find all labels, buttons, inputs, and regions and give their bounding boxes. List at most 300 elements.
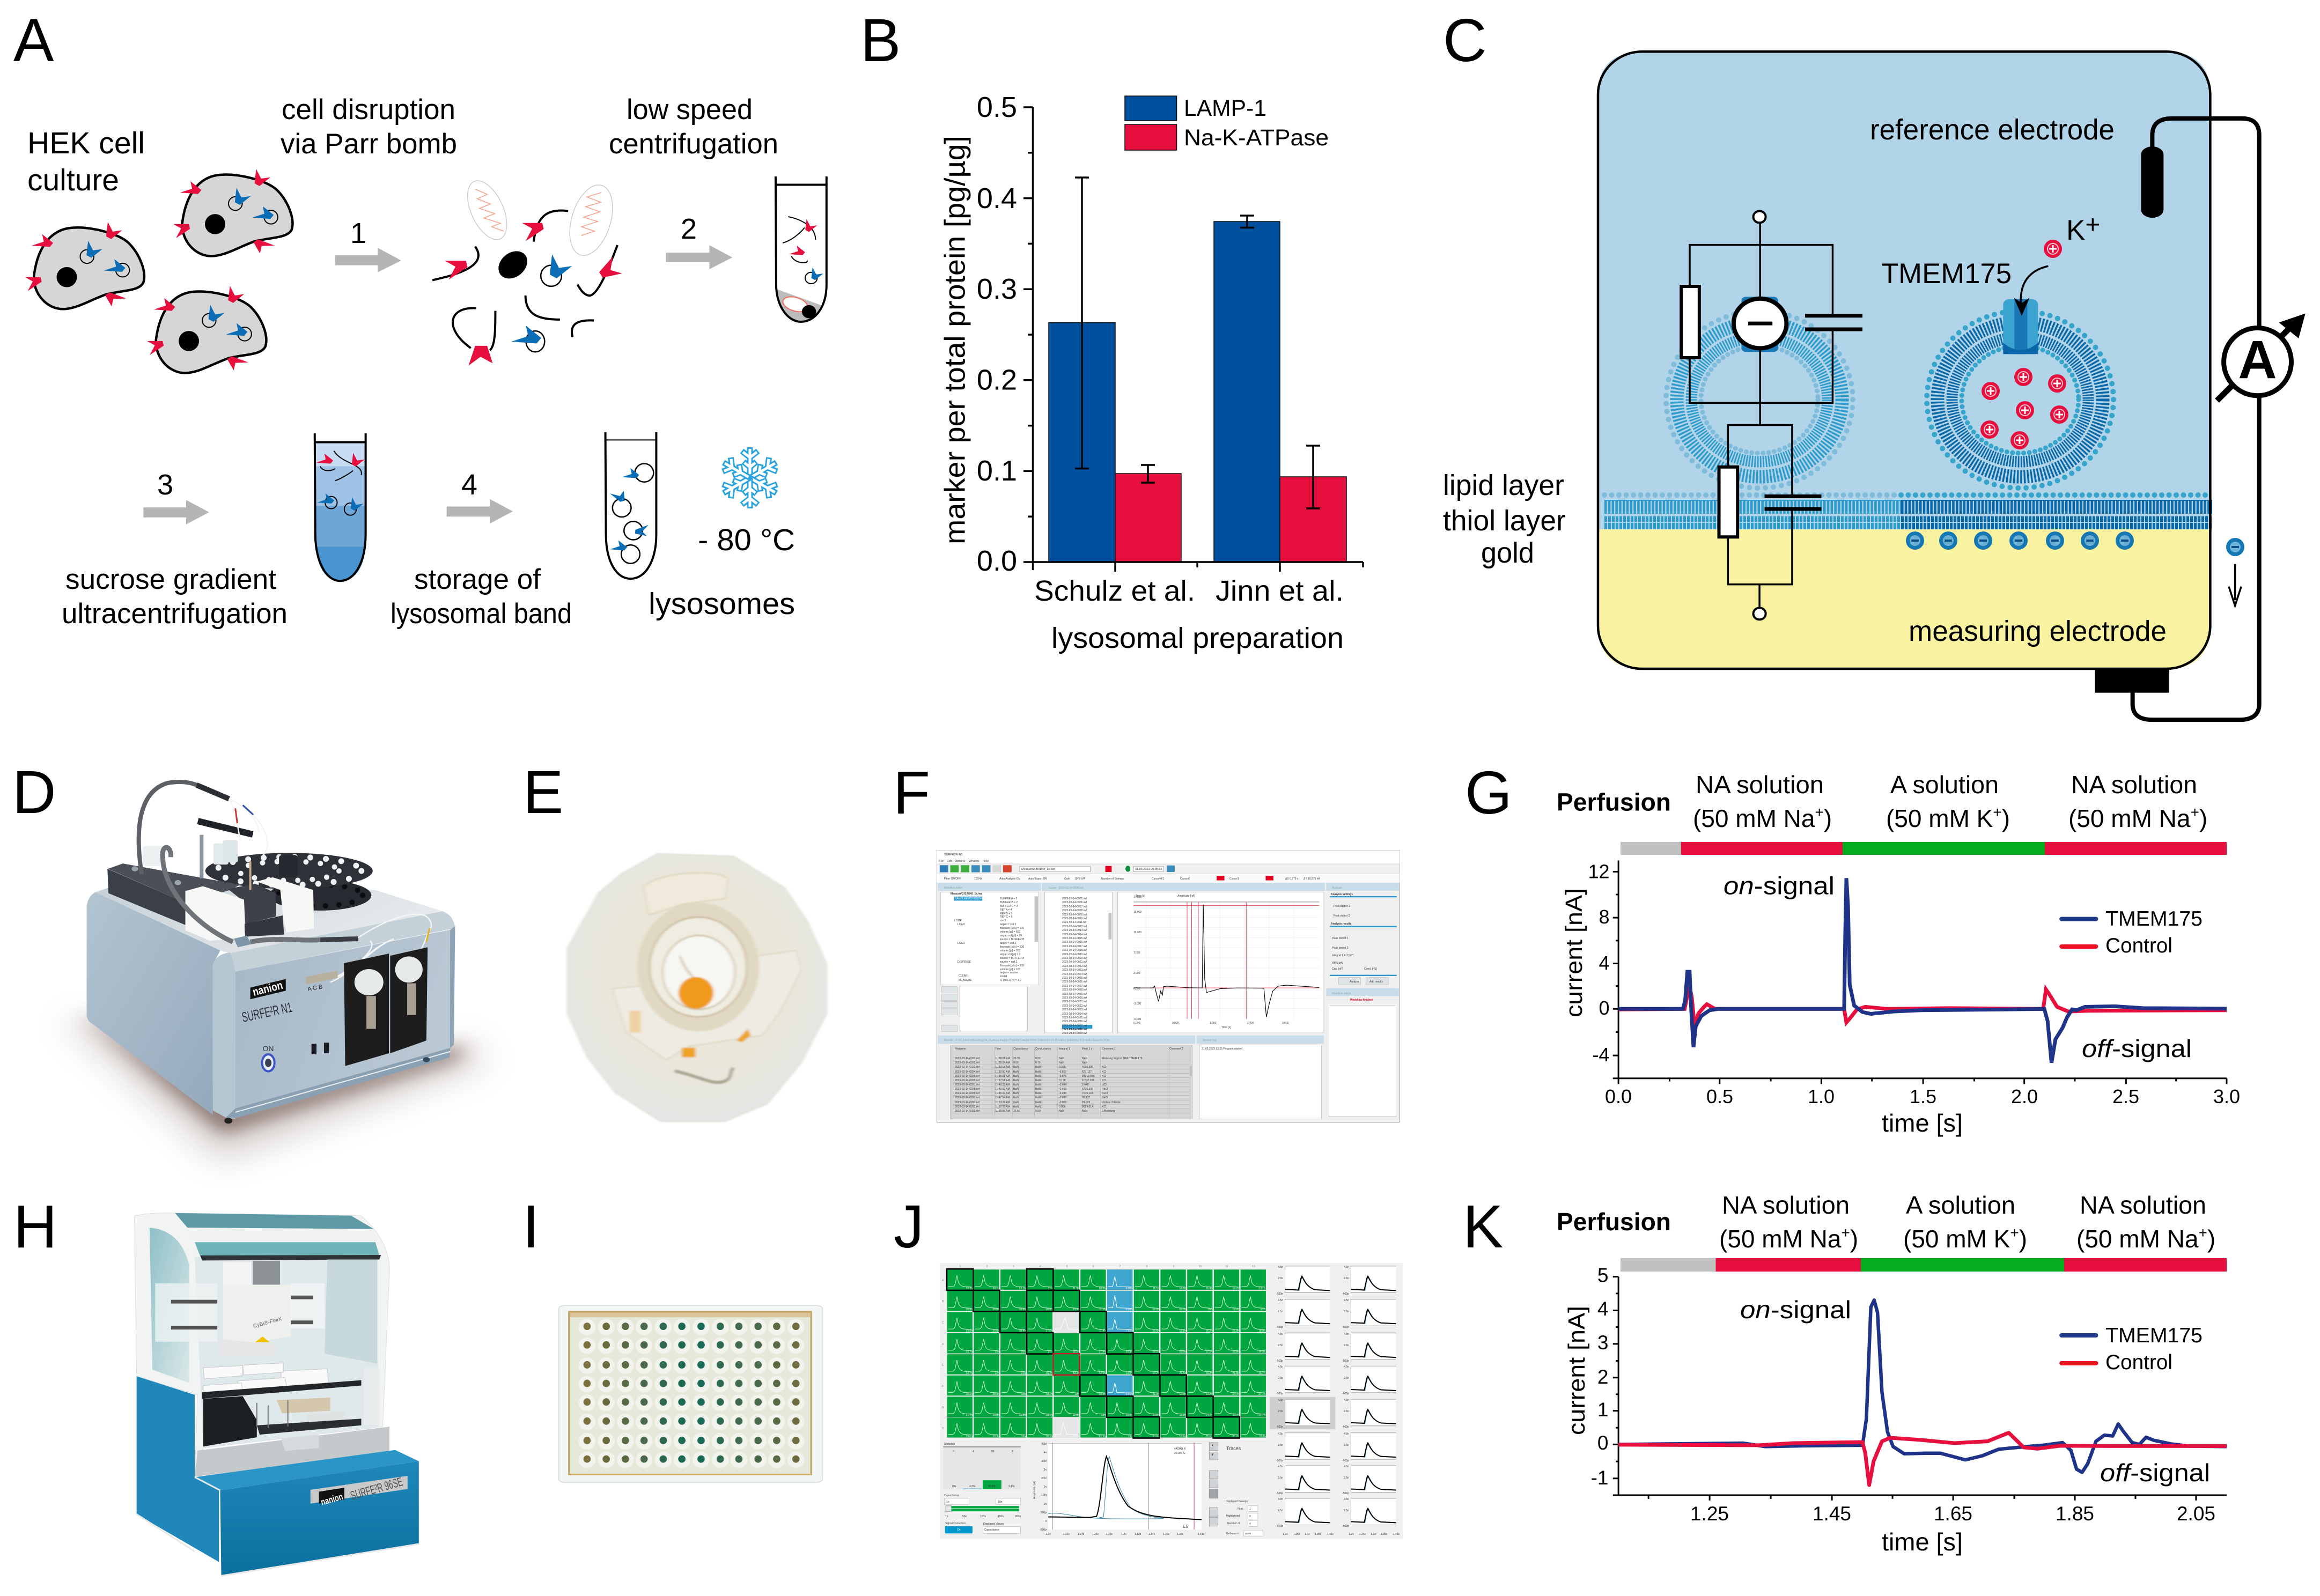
instrument labels: nanion [320, 1491, 344, 1508]
solution labels: + [1815, 804, 1824, 821]
title and menu bars [937, 850, 1400, 864]
screenshot text: 11:28:34 AM [995, 1061, 1010, 1065]
screenshot text: 2.5n [1344, 1509, 1349, 1512]
screenshot text: BUFFER C = 3 [1000, 905, 1018, 908]
screenshot text: 1.36s [1163, 1533, 1170, 1536]
screenshot text: 4 [973, 1450, 974, 1453]
screenshot text: Analysis settings [1331, 893, 1353, 896]
screenshot text: NaN [1035, 1101, 1041, 1104]
screenshot text: 3 [1013, 1265, 1014, 1268]
screenshot text: NaN [1035, 1105, 1041, 1109]
label G: G [1465, 759, 1512, 826]
screenshot text: 1.2s [1045, 1533, 1051, 1536]
screenshot text: 20n [1021, 1350, 1026, 1354]
logo plate [311, 1476, 408, 1504]
screenshot text: 16.1n [1258, 1372, 1265, 1375]
small trace charts [1285, 1266, 1396, 1525]
screenshot text: KCl [1102, 1079, 1106, 1082]
screenshot text: 22.1n [1179, 1372, 1186, 1375]
panel: G TMEM175 N1 recording [1465, 759, 2240, 1137]
panel: H SURFE2R 96SE instrument [13, 1193, 419, 1576]
x tick labels: 1.5 [1910, 1085, 1936, 1107]
instrument labels: ON [263, 1044, 274, 1053]
screenshot text: Measure\3 BA8+8_1s.iwe [951, 892, 983, 896]
solution labels: (50 mM Na [2076, 1225, 2198, 1253]
screenshot text: -500p [1342, 1425, 1349, 1429]
y tick labels: 1 [1597, 1399, 1608, 1421]
arrow 1 [335, 248, 401, 272]
arrow 3 [143, 500, 209, 524]
screenshot text: NaN [1035, 1083, 1041, 1087]
text: cell disruption via Parr bomb: via Parr bomb [281, 128, 457, 160]
screenshot text: 16.6n [1179, 1287, 1186, 1290]
screenshot text: Session log [1203, 1039, 1217, 1042]
panel: I 96-well sensor plate [522, 1193, 822, 1482]
screenshot text: Displayed Values [983, 1523, 1004, 1526]
screenshot text: NaN [1013, 1079, 1019, 1082]
solution labels: ) [2002, 804, 2010, 832]
screenshot text: 11:40:22 AM [995, 1083, 1010, 1087]
legend [1125, 95, 1329, 151]
screenshot text: 2023-03-14-0032.iwf [1062, 1004, 1087, 1008]
screenshot text: 4.5n [1344, 1432, 1349, 1436]
screenshot text [939, 853, 1383, 1113]
screenshot text: 16.8n [1232, 1350, 1239, 1354]
screenshot text: source = BUFFER A [1000, 957, 1025, 960]
screenshot text: 15.8n [992, 1414, 999, 1417]
ammeter letter: A [2238, 330, 2277, 390]
y tick labels [977, 91, 1017, 577]
screenshot text: 1.25s [1293, 1533, 1300, 1536]
blue and grey wells [1054, 1269, 1132, 1438]
screenshot text: A [942, 1279, 944, 1282]
screenshot text: 0.138 [1059, 1079, 1066, 1082]
screenshot text: 31.05.2023 13:25 Program started [1202, 1047, 1242, 1051]
screenshot text: 17.2n [1205, 1350, 1212, 1354]
screenshot text [942, 1265, 1400, 1536]
screenshot text: 50n [962, 1515, 967, 1518]
screenshot text: Cap. [nF] [1332, 967, 1343, 971]
screenshot text: Auto Analysis ON [999, 877, 1020, 881]
solution labels: + [2198, 1224, 2207, 1241]
screenshot text: 3n [1043, 1468, 1047, 1472]
annotation: on-signal: on-signal [1724, 872, 1835, 900]
axes [1023, 107, 1363, 572]
solution labels: (50 mM Na [1719, 1225, 1841, 1253]
screenshot text: 15.6n [1152, 1329, 1159, 1333]
screenshot text: LiCl [1102, 1083, 1107, 1087]
screenshot text: 150n [998, 1515, 1004, 1518]
sensor plate [559, 1305, 822, 1482]
step numbers: 3 [157, 469, 173, 501]
top glass [175, 1213, 374, 1229]
screenshot text: 1.2s [1283, 1533, 1288, 1536]
vesicle: left (control, equivalent circuit) [1666, 311, 1853, 488]
screenshot text: 2.5n [1278, 1444, 1283, 1447]
screenshot text: 2023-03-14-0039.iwf [1062, 1032, 1087, 1035]
screenshot text: NaN [1013, 1096, 1019, 1099]
central block [228, 884, 284, 937]
y axis title: current [nA] [1561, 888, 1587, 1017]
screenshot text: 2023-03-14-0008.iwf [1062, 909, 1087, 912]
white base edges [137, 1477, 419, 1576]
screenshot text: Conductance [1035, 1047, 1051, 1051]
screenshot text: NaN [1082, 1110, 1087, 1113]
screenshot text: -500p [1276, 1492, 1283, 1495]
screenshot text: 12 [1252, 1265, 1255, 1268]
screenshot text: KCl [1102, 1105, 1106, 1109]
screenshot text: 17,000 [1133, 896, 1142, 899]
screenshot text: 11:30:18 AM [995, 1066, 1010, 1069]
screenshot text: -500p [1276, 1525, 1283, 1528]
screenshot text: KCl [1102, 1075, 1106, 1078]
legend labels: Control [2105, 1351, 2172, 1374]
screenshot text: 18.3n [1045, 1435, 1052, 1438]
screenshot text: 1,600 [1210, 1022, 1217, 1025]
TMEM175 trace [1618, 878, 2227, 1063]
screenshot text: 18.7n [1232, 1287, 1239, 1290]
screenshot text: 2023-03-14-0021.iwf [955, 1057, 979, 1060]
screenshot text: Time [s] [1136, 895, 1145, 898]
front face [235, 929, 453, 1109]
screenshot text: 4.5n [1041, 1443, 1047, 1446]
panel: F software screenshot [893, 759, 1400, 1122]
screenshot text: 12.9n [1099, 1372, 1106, 1375]
corner column [213, 952, 235, 1119]
screenshot text: -500p [1276, 1459, 1283, 1462]
TMEM175 trace [1618, 1300, 2227, 1472]
power button [262, 1054, 275, 1072]
screenshot text: 84312.095 [1082, 1075, 1095, 1078]
screenshot text: 13.8n [1179, 1435, 1186, 1438]
screenshot text: -0.876 [1059, 1075, 1066, 1078]
interior [195, 1257, 378, 1448]
screenshot text: First [1238, 1508, 1243, 1511]
selected items [954, 896, 1397, 1029]
annotation: off-signal: off-signal [2082, 1035, 2192, 1062]
screenshot text: 4.5n [1344, 1498, 1349, 1501]
front top bevel [230, 911, 455, 972]
y tick labels: 0.3 [977, 273, 1017, 305]
screenshot text: 4.5n [1344, 1399, 1349, 1402]
screenshot text: 21.7n [966, 1414, 973, 1417]
electron in external wire [2226, 538, 2244, 556]
screenshot text: 2023-03-14-0020.iwf [1062, 957, 1087, 960]
screenshot text: 15.9n [1205, 1435, 1212, 1438]
screenshot text: 4.5n [1278, 1399, 1283, 1402]
screenshot text: -500p [1342, 1459, 1349, 1462]
bottom strip [226, 1048, 450, 1118]
screenshot text: Analysis results [1331, 922, 1352, 926]
screenshot text: NaN [1013, 1105, 1019, 1109]
screenshot text: 12.8n [1179, 1393, 1186, 1396]
x tick labels: 1.0 [1808, 1085, 1835, 1107]
icon: HEK cell 3 [140, 286, 266, 373]
chamber backgrounds [1598, 51, 2210, 669]
screenshot text: 4.5n [1278, 1432, 1283, 1436]
screenshot text: 20.3nF C [1174, 1452, 1185, 1455]
screenshot text: 18.2n [1072, 1350, 1079, 1354]
text: low speed centrifugation: low speed [627, 94, 753, 125]
cabinet top step [195, 1450, 419, 1490]
orange contacts [629, 1011, 751, 1057]
screenshot text: 9.99n [1125, 1308, 1132, 1311]
screenshot text: 3,000 [1282, 1022, 1289, 1025]
screenshot text: 2023-03-14-0027.iwf [1062, 985, 1087, 988]
screenshot text: 16.5n [1072, 1435, 1079, 1438]
screenshot text: Workflow finished [1350, 999, 1373, 1002]
x tick labels: 3.0 [2213, 1085, 2240, 1107]
bars [1049, 221, 1346, 562]
dark shadow [83, 1017, 465, 1134]
reference electrode [2141, 146, 2163, 218]
screenshot text: NaN [1035, 1070, 1041, 1074]
y tick labels: 0.0 [977, 545, 1017, 577]
screenshot text: 1 [960, 1265, 961, 1268]
tube: lysosomal band [606, 432, 656, 579]
instrument labels [253, 1316, 404, 1508]
text: K+: + [2085, 211, 2100, 239]
connector [305, 971, 338, 985]
screenshot text: -500p [1276, 1326, 1283, 1329]
y tick labels: 4 [1599, 952, 1609, 974]
drawings in panel C [1598, 51, 2306, 720]
statistics panel [943, 1446, 1021, 1489]
white block left [186, 886, 245, 941]
screenshot text: Add results [1369, 980, 1383, 984]
screenshot text: MEASURE [959, 979, 972, 982]
screenshot text: REF B = 5 [1000, 912, 1012, 915]
screenshot text: 11:37:51 AM [995, 1079, 1010, 1082]
screenshot text: Peak detect 2 [1332, 947, 1349, 950]
screenshot text: 14.7n [1258, 1414, 1265, 1417]
blue left cabinet [137, 1376, 219, 1562]
x tick labels: 1.65 [1934, 1503, 1972, 1525]
perfusion bar [1621, 842, 2227, 855]
screenshot text: -0.084 [1059, 1083, 1066, 1087]
screenshot text: 2.51n [1258, 1287, 1265, 1290]
channel under circuit [1742, 297, 1778, 352]
screenshot text: 2023-03-14-0022.iwf [1062, 965, 1087, 968]
screenshot text: 2.5n [1278, 1277, 1283, 1280]
screenshot text: 2023-03-14-0024.iwf [1062, 973, 1087, 976]
screenshot text: 11.1n [1153, 1287, 1159, 1290]
screenshot text: -500p [1342, 1292, 1349, 1296]
panel headers [938, 883, 1399, 1044]
screenshot text: 4.2% [969, 1485, 976, 1488]
screenshot text: -0.023 [1059, 1088, 1066, 1091]
screenshot text: 11.4n [1099, 1329, 1106, 1333]
screenshot text: CsCl [1102, 1092, 1108, 1095]
screenshot text: 14.8n [1072, 1329, 1079, 1333]
screenshot text: 4.5n [1278, 1498, 1283, 1501]
screenshot text: 2023-03-14-0012.iwf [1062, 925, 1087, 928]
screenshot text: NaN [1035, 1066, 1041, 1069]
screenshot text: 11:45:23 AM [995, 1092, 1010, 1095]
screenshot text: -500p [1342, 1359, 1349, 1363]
screenshot text: Messung beginnt HEK TMEM 175 [1102, 1057, 1143, 1060]
window background [940, 1263, 1403, 1539]
solution labels: ) [1850, 1225, 1858, 1253]
legend control line [2061, 944, 2096, 949]
x category labels: Schulz et al. [1034, 575, 1195, 607]
screenshot text: 18.7n [1045, 1393, 1052, 1396]
screenshot text: 17.7n [1232, 1393, 1239, 1396]
screenshot text: 2.5n [1344, 1476, 1349, 1480]
screenshot text: B [942, 1300, 944, 1303]
screenshot text: -6,000 [1133, 1018, 1141, 1021]
screenshot text: 2023-03-14-0023.iwf [1062, 969, 1087, 972]
screenshot text: NaN [1082, 1061, 1087, 1065]
black rail [201, 1255, 381, 1260]
pumps [344, 947, 428, 1066]
screenshot text: 4 [1040, 1265, 1041, 1268]
screenshot text: 3.5n [1041, 1460, 1047, 1463]
screenshot text: 0.00 [1013, 1061, 1019, 1065]
panel: A lysosome preparation workflow [13, 6, 827, 630]
screenshot text: E5 [1183, 1524, 1188, 1529]
y tick labels: 5 [1597, 1265, 1608, 1286]
screenshot text: 11537.998 [1082, 1079, 1094, 1082]
panel: D SURFE2R N1 instrument [12, 758, 485, 1164]
screenshot text: 11.2n [1153, 1393, 1159, 1396]
screenshot text: 2 [986, 1265, 988, 1268]
screenshot text: 1.3s [1305, 1533, 1310, 1536]
y tick labels: 0 [1599, 997, 1609, 1019]
screenshot text: LOAD [958, 923, 965, 926]
screenshot text: Workflow editor [944, 886, 963, 890]
screenshot text: 13.2n [1179, 1414, 1186, 1417]
sensor grid [947, 1269, 1266, 1438]
screenshot text: SAMPLER POSITIONS [955, 897, 983, 900]
screenshot text: NaN [1013, 1066, 1019, 1069]
y tick labels: 12 [1588, 860, 1609, 883]
screenshot text: 2023-03-14-0027.iwf [955, 1083, 979, 1087]
screenshot text: 9 [1173, 1265, 1175, 1268]
text: measuring electrode: measuring electrode [1909, 615, 2167, 647]
screenshot text: -500p [1276, 1425, 1283, 1429]
screenshot text: 4 [1249, 1523, 1251, 1526]
screenshot text: 20.3n [1072, 1308, 1079, 1311]
screenshot text: source = coil 2 [1000, 960, 1018, 964]
dark module [107, 863, 240, 925]
x tick labels: 2.05 [2177, 1503, 2215, 1525]
solution labels: NA solution [2080, 1191, 2206, 1219]
screenshot text: ΔY 16,275 nA [1303, 877, 1320, 881]
screenshot text: 13.8n [1019, 1414, 1026, 1417]
right glass [325, 1259, 377, 1363]
K+ ion [2044, 240, 2062, 258]
screenshot text: Measure\3 BA8+8_1s.iwe [1021, 868, 1055, 871]
text: storage of lysosomal band: lysosomal band [391, 598, 572, 630]
screenshot text: 10.8n [1072, 1414, 1079, 1417]
screenshot text: 19.1n [1259, 1435, 1266, 1438]
screenshot text: 1.3s [1371, 1533, 1376, 1536]
screenshot text: Time [995, 1047, 1001, 1051]
screenshot text: Highlighted [1226, 1514, 1240, 1518]
screenshot text: 18.4n [1019, 1329, 1026, 1333]
plate frame [559, 1305, 822, 1482]
screenshot text: H [942, 1427, 944, 1430]
screenshot text: Statistics [944, 1443, 955, 1446]
soft shadow [63, 1017, 485, 1164]
screenshot text: Time [s] [1221, 1026, 1231, 1029]
text: storage of lysosomal band [391, 564, 572, 630]
label F: F [893, 759, 930, 826]
screenshot text: 4.5n [1344, 1333, 1349, 1336]
screenshot text: 12.2n [1152, 1308, 1159, 1311]
arrowhead into channel [2014, 298, 2030, 316]
screenshot text: Comment 1 [1102, 1047, 1116, 1051]
y tick labels: 0.2 [977, 364, 1017, 396]
screenshot text: 1.41s [1393, 1533, 1400, 1536]
lower racks [257, 1398, 361, 1435]
screenshot text: NaN [1082, 1057, 1087, 1060]
cable clamp [234, 936, 252, 947]
x axis title: time [s] [1882, 1109, 1963, 1137]
screenshot graphics [937, 850, 1400, 1122]
legend labels: TMEM175 [2105, 907, 2203, 930]
text: reference electrode: reference electrode [1870, 114, 2115, 146]
legend: Na-K-ATPase [1184, 125, 1329, 151]
screenshot text: 14.1n [1205, 1414, 1212, 1417]
screenshot text: 4.5n [1344, 1365, 1349, 1369]
screenshot text: 1.32s [1135, 1533, 1141, 1536]
screenshot text: RMS [pA] [1332, 962, 1344, 965]
screenshot text: E [942, 1364, 944, 1367]
text: sucrose gradient ultracentrifugation: ultracentrifugation [62, 598, 288, 630]
screenshot text: G [942, 1406, 944, 1409]
displayed values select [983, 1527, 1020, 1533]
feet [224, 1057, 430, 1124]
screenshot text: 1.41s [1327, 1533, 1334, 1536]
screenshot text: Peak 1 y [1082, 1047, 1093, 1051]
teal glass strip [195, 1242, 379, 1257]
screenshot text: NaN [1035, 1096, 1041, 1099]
legend control line [2061, 1361, 2096, 1365]
screenshot text: -0.065 [1059, 1101, 1066, 1104]
screenshot text: 2.5n [1344, 1310, 1349, 1313]
status panel [364, 1368, 380, 1425]
y tick labels [1588, 860, 1609, 1066]
label K: K [1463, 1193, 1503, 1260]
screenshot text: F [942, 1385, 944, 1388]
screenshot text: 2.5n [1344, 1344, 1349, 1347]
sweep inputs [1244, 1506, 1263, 1536]
screenshot text: 1.25s [1359, 1533, 1366, 1536]
screenshot text: 1p [945, 1515, 948, 1518]
x tick labels: 2.0 [2011, 1085, 2038, 1107]
screenshot text: 14.7n [966, 1372, 973, 1375]
text: lipid layer, thiol layer, gold [1443, 469, 1566, 569]
electrons in gold [1906, 531, 2134, 550]
screenshot text: 1.26s [1092, 1533, 1099, 1536]
screenshot text: -0.280 [1059, 1092, 1066, 1095]
screenshot text: target = coil 1 [1000, 942, 1016, 945]
screenshot text: Traces [1226, 1446, 1241, 1451]
legend labels [2105, 1324, 2203, 1374]
text: lipid layer, thiol layer, gold: thiol layer [1443, 505, 1566, 537]
screenshot text: ΔX 0,779 s [1285, 877, 1299, 881]
screenshot text: 2023-03-14-0030.iwf [1062, 996, 1087, 1000]
screenshot text: 1.24s [1078, 1533, 1085, 1536]
capacitance inputs [944, 1498, 1020, 1505]
fluid tubes [229, 799, 431, 982]
screenshot text: 2023-03-14-0038.iwf [1062, 1028, 1087, 1031]
signal correction button [945, 1526, 973, 1533]
chart tool buttons [1209, 1443, 1218, 1526]
solution labels: + [1841, 1224, 1850, 1241]
